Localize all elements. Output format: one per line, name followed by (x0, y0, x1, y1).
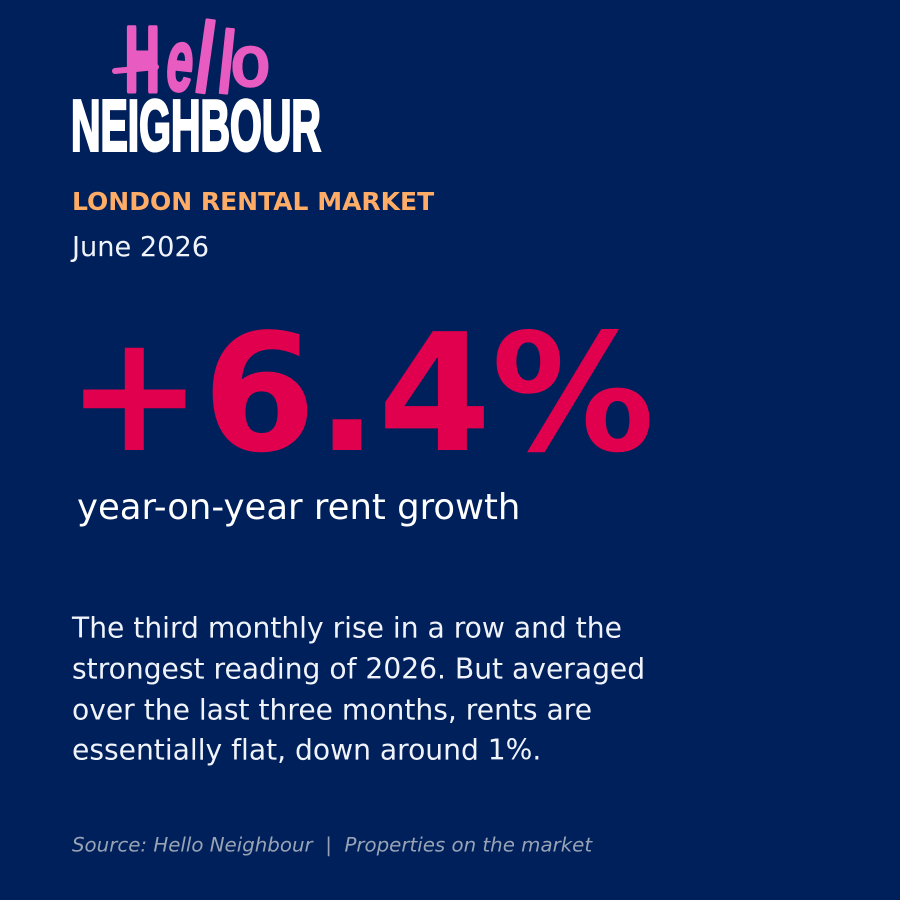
heading: LONDON RENTAL MARKET (72, 187, 434, 216)
stat label: year-on-year rent growth (77, 487, 520, 528)
body text: The third monthly rise in a row and the (71, 612, 622, 644)
body text: essentially flat, down around 1%. (72, 734, 541, 766)
logo word: Hello: H (125, 8, 160, 111)
logo word: Hello: o (230, 19, 271, 104)
date: June 2026 (70, 232, 209, 263)
body text: strongest reading of 2026. But averaged (72, 652, 645, 686)
big stat: +6.4% (66, 300, 655, 489)
logo word: Hello: l (214, 13, 239, 113)
body text (71, 612, 645, 766)
logo word: Hello (115, 2, 271, 115)
body text: over the last three months, rents are (72, 694, 592, 726)
logo word: Hello: l (189, 2, 222, 115)
logo word: Hello: e (162, 11, 199, 112)
logo: Hello Neighbour (71, 2, 321, 167)
logo word: NEIGHBOUR: NEIGHBOUR (71, 87, 321, 167)
source note: Source: Hello Neighbour | Properties on the market (72, 834, 593, 856)
